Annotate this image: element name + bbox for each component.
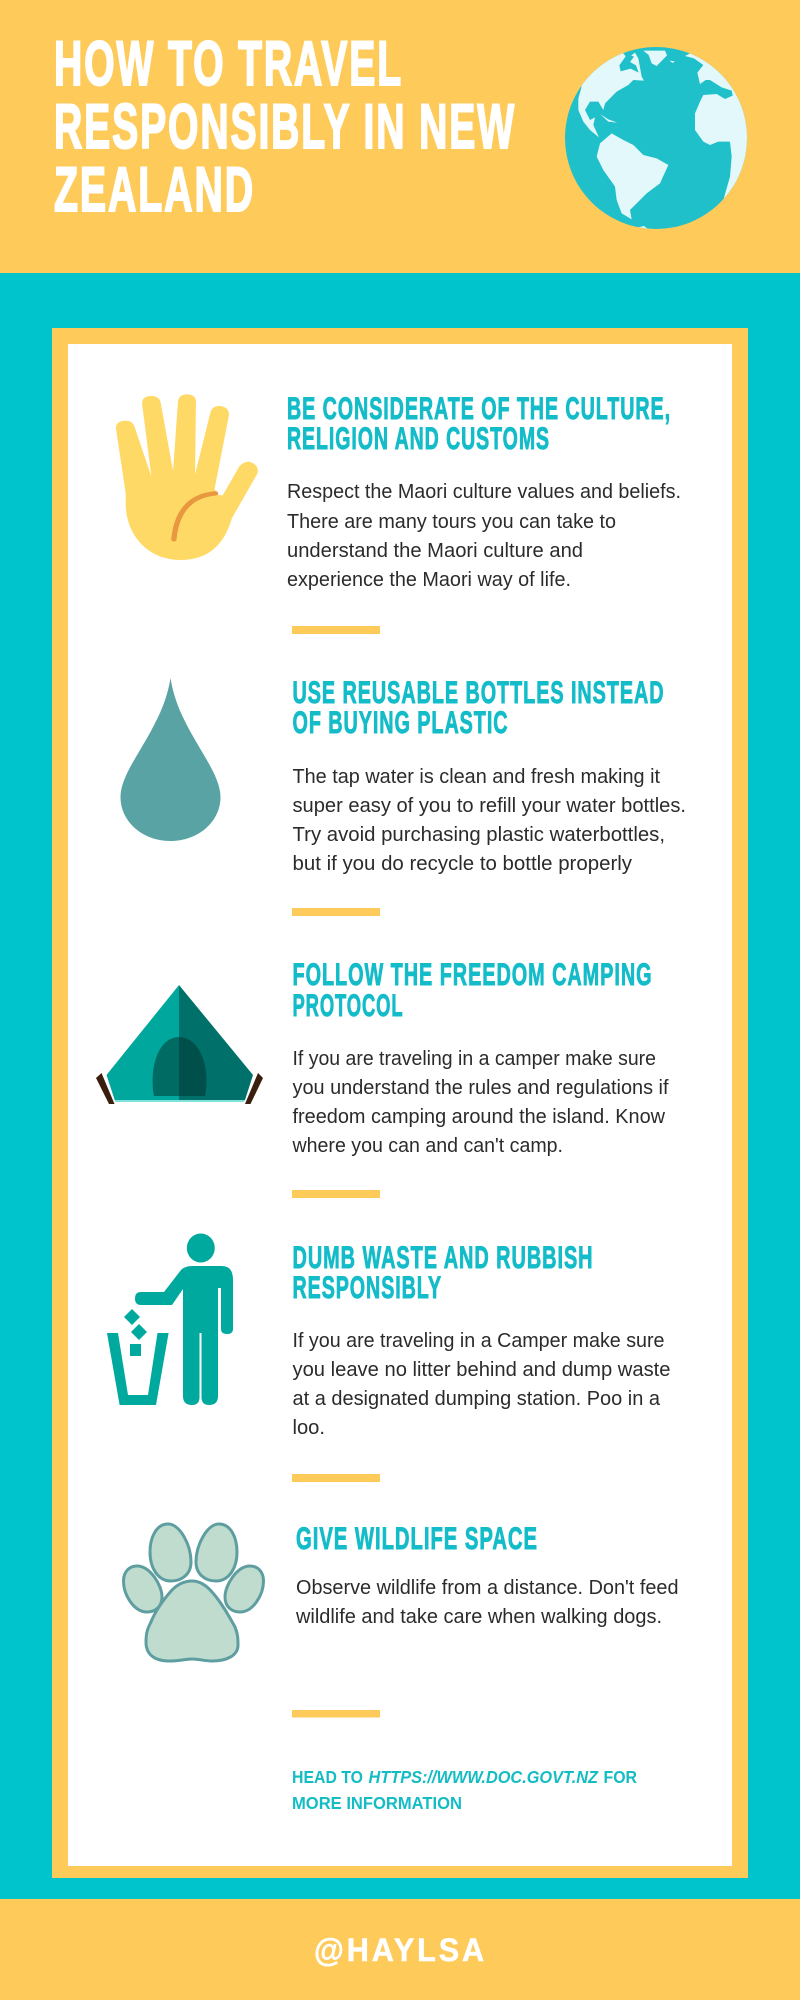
heading — [292, 1239, 594, 1305]
heading: DUMB WASTE AND RUBBISH — [292, 1239, 594, 1275]
text block: loo. — [292, 1417, 325, 1439]
panel: footer band — [0, 1899, 800, 2000]
panel: freedom camping — [96, 956, 669, 1157]
icon: globe — [565, 47, 747, 229]
callout: more information: HTTPS://WWW.DOC.GOVT.NZ — [368, 1767, 599, 1787]
text block: understand the Maori culture and — [287, 540, 583, 562]
heading: RELIGION AND CUSTOMS — [287, 420, 550, 456]
heading: RESPONSIBLY — [292, 1269, 442, 1305]
handle: @HAYLSA — [314, 1932, 487, 1968]
title: HOW TO TRAVEL — [54, 29, 403, 99]
panel: culture — [116, 390, 681, 591]
heading — [292, 674, 664, 740]
text block — [287, 481, 681, 591]
panel: yellow frame — [52, 328, 748, 1878]
text block: The tap water is clean and fresh making it — [292, 766, 660, 788]
panel: wildlife — [124, 1520, 678, 1661]
text block: Try avoid purchasing plastic waterbottles, — [292, 824, 665, 846]
text block: There are many tours you can take to — [287, 511, 616, 533]
callout: more information — [292, 1767, 637, 1813]
text block — [292, 1048, 669, 1157]
title — [54, 29, 516, 225]
text block: but if you do recycle to bottle properly — [292, 853, 632, 875]
text block: at a designated dumping station. Poo in a — [292, 1388, 661, 1410]
title: RESPONSIBLY IN NEW — [54, 92, 516, 162]
icon: tent — [96, 985, 263, 1104]
text block: super easy of you to refill your water bottles. — [292, 795, 686, 817]
text block — [292, 766, 686, 875]
text block: you leave no litter behind and dump waste — [292, 1359, 670, 1381]
heading: GIVE WILDLIFE SPACE — [296, 1520, 538, 1556]
text block: If you are traveling in a Camper make sure — [292, 1330, 664, 1352]
text block — [295, 1577, 678, 1628]
text block: If you are traveling in a camper make sure — [292, 1048, 656, 1070]
heading: PROTOCOL — [292, 987, 404, 1023]
callout: more information: FOR — [604, 1767, 637, 1787]
text block — [292, 1330, 670, 1439]
icon: person and bin — [107, 1234, 233, 1405]
text block: Respect the Maori culture values and beliefs. — [287, 481, 681, 503]
callout: more information: HEAD TO — [292, 1767, 363, 1787]
panel: header band — [0, 0, 800, 273]
icon: water drop — [120, 678, 220, 841]
heading — [287, 390, 671, 456]
icon: paw — [124, 1524, 264, 1661]
text block: where you can and can't camp. — [292, 1135, 563, 1157]
callout: more information: MORE INFORMATION — [292, 1793, 462, 1813]
title: ZEALAND — [54, 155, 255, 225]
heading: OF BUYING PLASTIC — [292, 704, 508, 740]
panel: waste and rubbish — [107, 1234, 670, 1439]
panel: reusable bottles — [120, 674, 686, 875]
text block: you understand the rules and regulations if — [292, 1077, 669, 1099]
icon: hand — [116, 394, 258, 560]
text block: Observe wildlife from a distance. Don't feed — [296, 1577, 678, 1599]
heading — [292, 956, 652, 1023]
text block: experience the Maori way of life. — [287, 569, 571, 591]
text block: wildlife and take care when walking dogs. — [295, 1606, 662, 1628]
text block: freedom camping around the island. Know — [292, 1106, 666, 1128]
